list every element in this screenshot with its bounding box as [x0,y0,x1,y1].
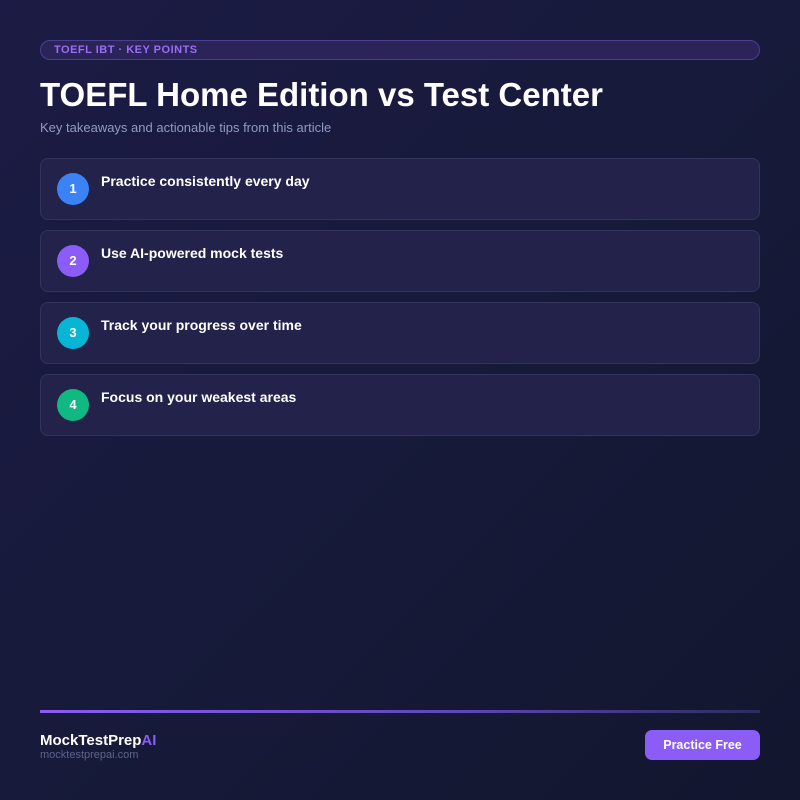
tag pill [40,40,760,60]
badge 1: 1 [69,181,77,196]
title: TOEFL Home Edition vs Test Center [40,76,603,113]
button: Practice Free [663,738,742,752]
badge 2: 2 [69,253,77,268]
tag pill: TOEFL IBT · KEY POINTS [54,44,198,56]
url: mocktestprepai.com [40,749,138,761]
badge 4 [57,389,89,421]
badge 4: 4 [69,397,77,412]
text 2: Use AI-powered mock tests [101,245,283,261]
card 2 [40,230,760,292]
badge 3: 3 [69,325,77,340]
card 3 [40,302,760,364]
card 4 [40,374,760,436]
badge 1 [57,173,89,205]
text 3: Track your progress over time [101,317,302,333]
badge 3 [57,317,89,349]
button [645,730,760,760]
text 1: Practice consistently every day [101,173,310,189]
card 1 [40,158,760,220]
badge 2 [57,245,89,277]
brand: MockTestPrepAI [40,732,156,749]
subtitle: Key takeaways and actionable tips from this article [40,120,331,135]
text 4: Focus on your weakest areas [101,389,296,405]
